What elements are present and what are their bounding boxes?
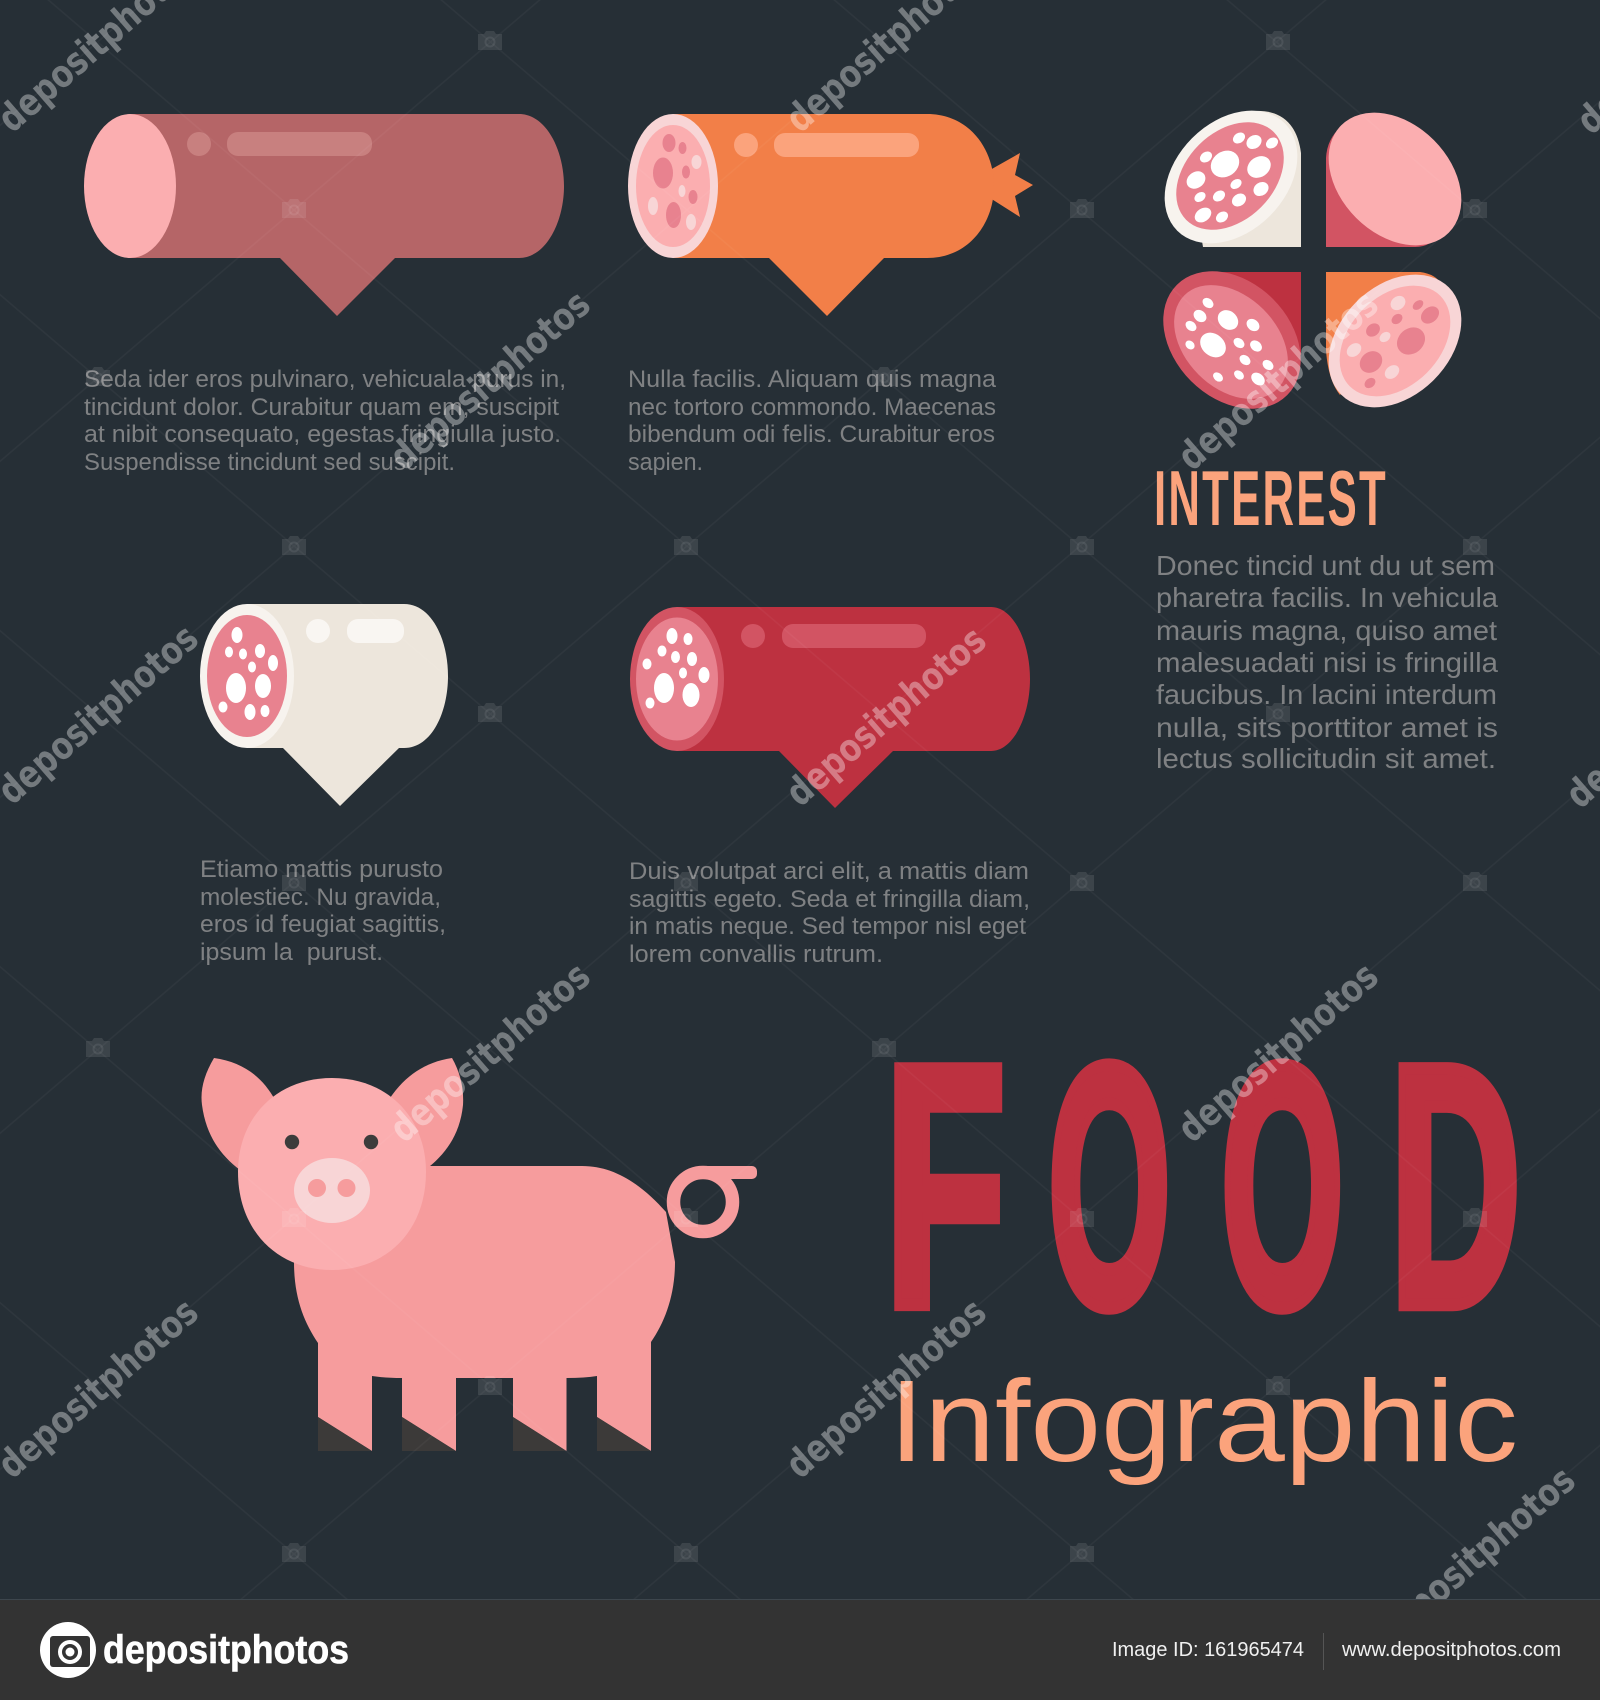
slice: bottom-left red salami (1136, 244, 1328, 436)
text block: sausage 2 description: sapien. (628, 449, 703, 476)
watermark: depositphotos text: depositphotos (381, 282, 599, 479)
text block: sausage 1 description: at nibit consequato, egestas fringiulla justo. (84, 421, 561, 448)
text block: sausage 4 description: sagittis egeto. Seda et fringilla diam, (629, 886, 1030, 913)
text block: interest paragraph: nulla, sits porttitor amet is (1156, 712, 1498, 743)
icon: pig hooves (318, 1417, 651, 1451)
text block: sausage 3 description: ipsum la purust. (200, 939, 383, 966)
icon: pig snout (294, 1158, 370, 1223)
text block: interest paragraph: Donec tincid unt du ut sem (1156, 550, 1495, 581)
text block: interest paragraph: mauris magna, quiso amet (1156, 615, 1497, 646)
icon: footer camera logo (40, 1622, 96, 1678)
footer image id: Image ID: 161965474 (1112, 1639, 1304, 1661)
watermark: depositphotos text: depositphotos (777, 1290, 995, 1487)
footer logotype: depositphotos (103, 1628, 349, 1672)
text block: sausage 2 description: bibendum odi felis. Curabitur eros (628, 421, 995, 448)
watermark: depositphotos text: depositphotos (381, 954, 599, 1151)
sausage 4: red salami (630, 607, 1030, 808)
text block: sausage 1 description: tincidunt dolor. Curabitur quam em, suscipit (84, 394, 559, 421)
illustration: pig (202, 1058, 757, 1451)
text block: interest paragraph (1156, 550, 1498, 774)
text block: sausage 4 description: in matis neque. Sed tempor nisl eget (629, 913, 1026, 940)
text block: sausage 1 description: Suspendisse tincidunt sed suscipit. (84, 449, 455, 476)
watermark: depositphotos text: depositphotos (1169, 954, 1387, 1151)
watermark: depositphotos text: depositphotos (777, 618, 995, 815)
icon: pig body and legs (294, 1166, 675, 1451)
text block: interest paragraph: malesuadati nisi is fringilla (1156, 647, 1498, 678)
slice: top-left white salami (1138, 84, 1324, 270)
title: FOOD (884, 994, 1521, 1379)
icon: four sausage slices (1136, 84, 1488, 436)
text block: sausage 2 description (628, 366, 997, 476)
text block: sausage 4 description: Duis volutpat arci elit, a mattis diam (629, 858, 1029, 885)
watermark: camera marks (86, 31, 1487, 1562)
text block: sausage 2 description: Nulla facilis. Aliquam quis magna (628, 366, 997, 393)
title: FOOD: O (1221, 994, 1344, 1378)
sausage 1: plain slice (84, 114, 564, 316)
text block: interest paragraph: faucibus. In lacini interdum (1156, 679, 1497, 710)
icon: pig eyes (285, 1135, 378, 1149)
text block: sausage 4 description: lorem convallis rutrum. (629, 941, 883, 968)
text block: sausage 3 description: Etiamo mattis purusto (200, 856, 443, 883)
sausage 3: white salami (200, 604, 448, 806)
text block: interest paragraph: pharetra facilis. In vehicula (1156, 582, 1498, 613)
slice: bottom-right orange (1302, 248, 1488, 434)
footer bar (0, 1599, 1600, 1700)
watermark: depositphotos text: depositphotos (1169, 282, 1387, 479)
title: FOOD: O (1048, 994, 1171, 1378)
footer website: www.depositphotos.com (1341, 1639, 1561, 1661)
text block: sausage 3 description: molestiec. Nu gravida, (200, 884, 441, 911)
title: FOOD: D (1390, 995, 1521, 1379)
icon: pig tail (674, 1166, 757, 1232)
text block: interest paragraph: lectus sollicitudin sit amet. (1156, 743, 1496, 774)
text block: sausage 4 description (629, 858, 1030, 968)
subtitle: Infographic: Infographic (889, 1356, 1518, 1486)
text block: sausage 3 description: eros id feugiat sagittis, (200, 911, 446, 938)
text block: sausage 2 description: nec tortoro commondo. Maecenas (628, 394, 996, 421)
text block: sausage 1 description (84, 366, 566, 476)
text block: sausage 3 description (200, 856, 446, 966)
title: FOOD: F (884, 994, 1006, 1378)
sausage 2: orange with tied end (628, 114, 1033, 316)
heading: INTEREST: INTEREST (1154, 456, 1388, 542)
icon: pig head (238, 1078, 426, 1270)
text block: sausage 1 description: Seda ider eros pulvinaro, vehicuala purus in, (84, 366, 566, 393)
icon: pig ears (202, 1058, 463, 1170)
slice: top-right plain (1302, 86, 1488, 272)
